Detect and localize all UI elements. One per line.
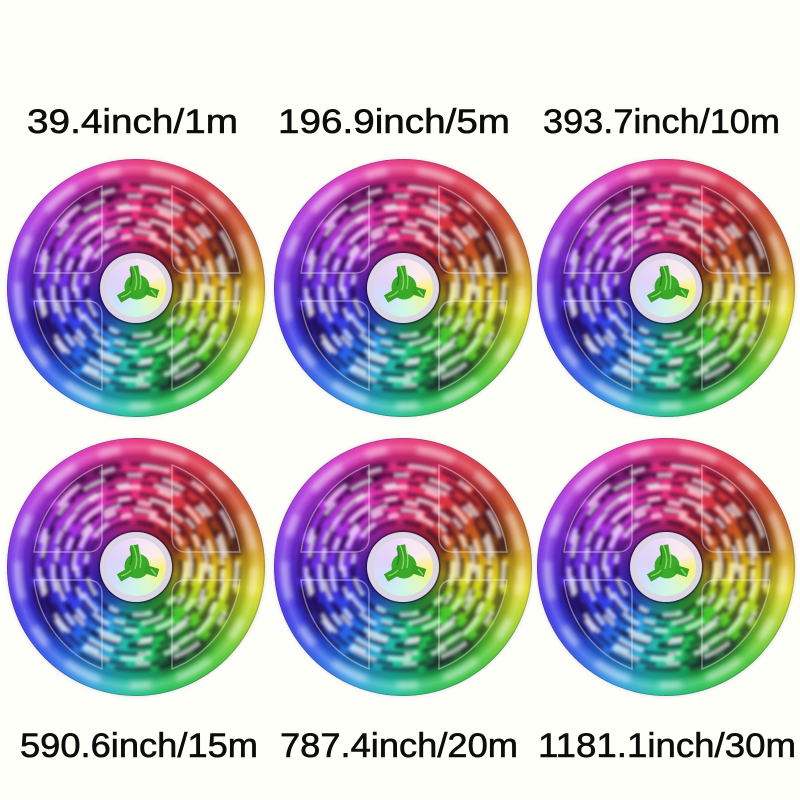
reel: 787.4inch/20m (274, 438, 532, 696)
label: 39.4inch/1m: 39.4inch/1m (27, 103, 238, 141)
label: 787.4inch/20m: 787.4inch/20m (280, 727, 518, 765)
reel: 393.7inch/10m (537, 159, 795, 417)
label: 196.9inch/5m: 196.9inch/5m (278, 103, 510, 141)
reel: 590.6inch/15m (7, 438, 265, 696)
label: 393.7inch/10m: 393.7inch/10m (543, 103, 780, 141)
reel: 1181.1inch/30m (537, 438, 795, 696)
label: 590.6inch/15m: 590.6inch/15m (20, 727, 258, 765)
reel: 196.9inch/5m (274, 159, 532, 417)
label: 1181.1inch/30m: 1181.1inch/30m (538, 727, 796, 765)
reel: 39.4inch/1m (7, 159, 265, 417)
